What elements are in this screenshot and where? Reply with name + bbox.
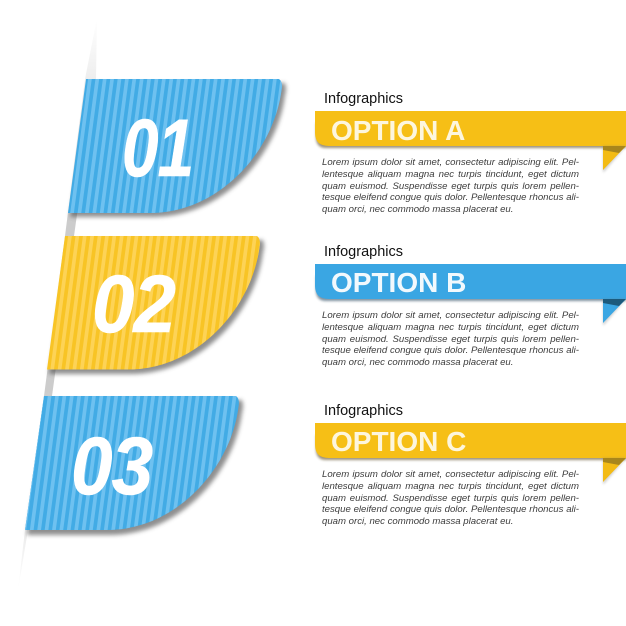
ribbon: option B xyxy=(315,264,626,325)
ribbon fold xyxy=(603,146,626,172)
ribbon: option C xyxy=(315,423,626,484)
text block: option B: quam orci, nec commodo massa placerat eu. xyxy=(322,357,513,368)
ribbon fold xyxy=(603,458,626,484)
panel: number 02 xyxy=(46,236,267,377)
text block: option B xyxy=(322,310,579,368)
text block: option A: lentesque aliquam magna nec turpis tincidunt, eget dictum xyxy=(322,169,579,180)
ribbon title: OPTION C xyxy=(331,426,466,457)
heading: infographics A: Infographics xyxy=(324,91,403,107)
text block: option A xyxy=(322,157,579,215)
ribbon fold xyxy=(603,299,626,325)
panel: number 01 xyxy=(68,79,289,220)
number: 03: 03 xyxy=(71,420,153,512)
heading: infographics B: Infographics xyxy=(324,244,403,260)
text block: option C: lentesque aliquam magna nec turpis tincidunt, eget dictum xyxy=(322,481,579,492)
text block: option C: quam orci, nec commodo massa placerat eu. xyxy=(322,516,513,527)
text block: option A: Lorem ipsum dolor sit amet, consectetur adipiscing elit. Pel- xyxy=(322,157,579,168)
text block: option A: quam euismod. Suspendisse eget turpis quis lorem pellen- xyxy=(322,181,579,192)
ribbon title: OPTION A xyxy=(331,115,465,146)
ribbon: option A xyxy=(315,111,626,172)
text block: option A: tesque eleifend congue quis dolor. Pellentesque rhoncus ali- xyxy=(322,192,579,203)
text block: option B: tesque eleifend congue quis dolor. Pellentesque rhoncus ali- xyxy=(322,345,579,356)
text block: option B: lentesque aliquam magna nec turpis tincidunt, eget dictum xyxy=(322,322,579,333)
number: 01: 01 xyxy=(122,102,193,194)
text block: option C: quam euismod. Suspendisse eget turpis quis lorem pellen- xyxy=(322,493,579,504)
text block: option A: quam orci, nec commodo massa placerat eu. xyxy=(322,204,513,215)
panel: number 03 xyxy=(24,396,246,538)
heading: infographics C: Infographics xyxy=(324,403,403,419)
background slit xyxy=(18,18,97,590)
text block: option C: Lorem ipsum dolor sit amet, consectetur adipiscing elit. Pel- xyxy=(322,469,579,480)
text block: option C: tesque eleifend congue quis dolor. Pellentesque rhoncus ali- xyxy=(322,504,579,515)
text block: option B: quam euismod. Suspendisse eget turpis quis lorem pellen- xyxy=(322,334,579,345)
ribbon title: OPTION B xyxy=(331,267,466,298)
text block: option C xyxy=(322,469,579,527)
text block: option B: Lorem ipsum dolor sit amet, consectetur adipiscing elit. Pel- xyxy=(322,310,579,321)
number: 02: 02 xyxy=(92,257,176,350)
